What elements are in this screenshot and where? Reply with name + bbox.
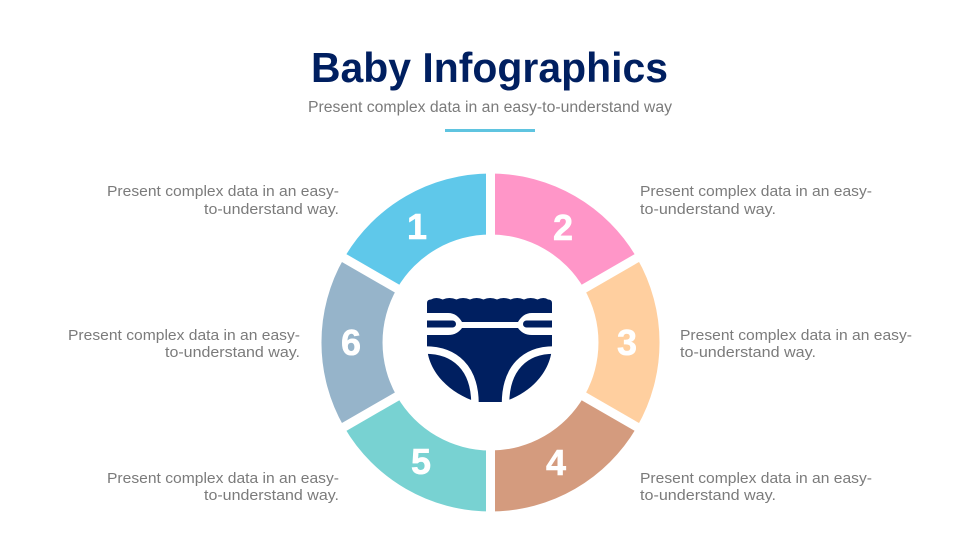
number 1: 1 <box>407 206 427 247</box>
number 4: 4 <box>546 442 566 483</box>
text block 4: to-understand way. <box>640 487 776 504</box>
number 3: 3 <box>617 322 637 363</box>
text block 6 <box>68 327 300 361</box>
text block 5: Present complex data in an easy- <box>107 470 339 487</box>
text block 1: Present complex data in an easy- <box>107 183 339 200</box>
text block 6: to-understand way. <box>165 344 300 361</box>
donut chart <box>321 165 660 520</box>
subtitle: Present complex data in an easy-to-understand way <box>308 99 672 116</box>
text block 2: to-understand way. <box>640 201 776 218</box>
number 5: 5 <box>411 441 431 482</box>
text block 3: Present complex data in an easy- <box>680 327 912 344</box>
segment 3 <box>584 258 660 427</box>
text block 1: to-understand way. <box>204 201 339 218</box>
text block 2: Present complex data in an easy- <box>640 183 872 200</box>
right tab <box>523 320 552 328</box>
title: Baby Infographics <box>311 44 668 91</box>
segment gaps <box>337 165 644 520</box>
text block 3 <box>680 327 912 361</box>
accent rule <box>445 129 535 132</box>
text block 5 <box>107 470 339 504</box>
text block 4: Present complex data in an easy- <box>640 470 872 487</box>
text block 3: to-understand way. <box>680 344 816 361</box>
text block 6: Present complex data in an easy- <box>68 327 300 344</box>
left tab <box>427 320 456 328</box>
leg openings <box>425 350 554 404</box>
segment 4 <box>490 396 637 512</box>
segment 1 <box>344 174 490 288</box>
text block 2 <box>640 183 872 218</box>
number 2: 2 <box>553 207 573 248</box>
segment 2 <box>490 174 637 288</box>
segment 5 <box>344 396 490 512</box>
text block 1 <box>107 183 339 218</box>
icon: diaper <box>425 298 554 404</box>
number 6: 6 <box>341 322 361 363</box>
text block 4 <box>640 470 872 504</box>
belt band <box>427 313 552 335</box>
text block 5: to-understand way. <box>204 487 339 504</box>
segment 6 <box>321 258 397 427</box>
